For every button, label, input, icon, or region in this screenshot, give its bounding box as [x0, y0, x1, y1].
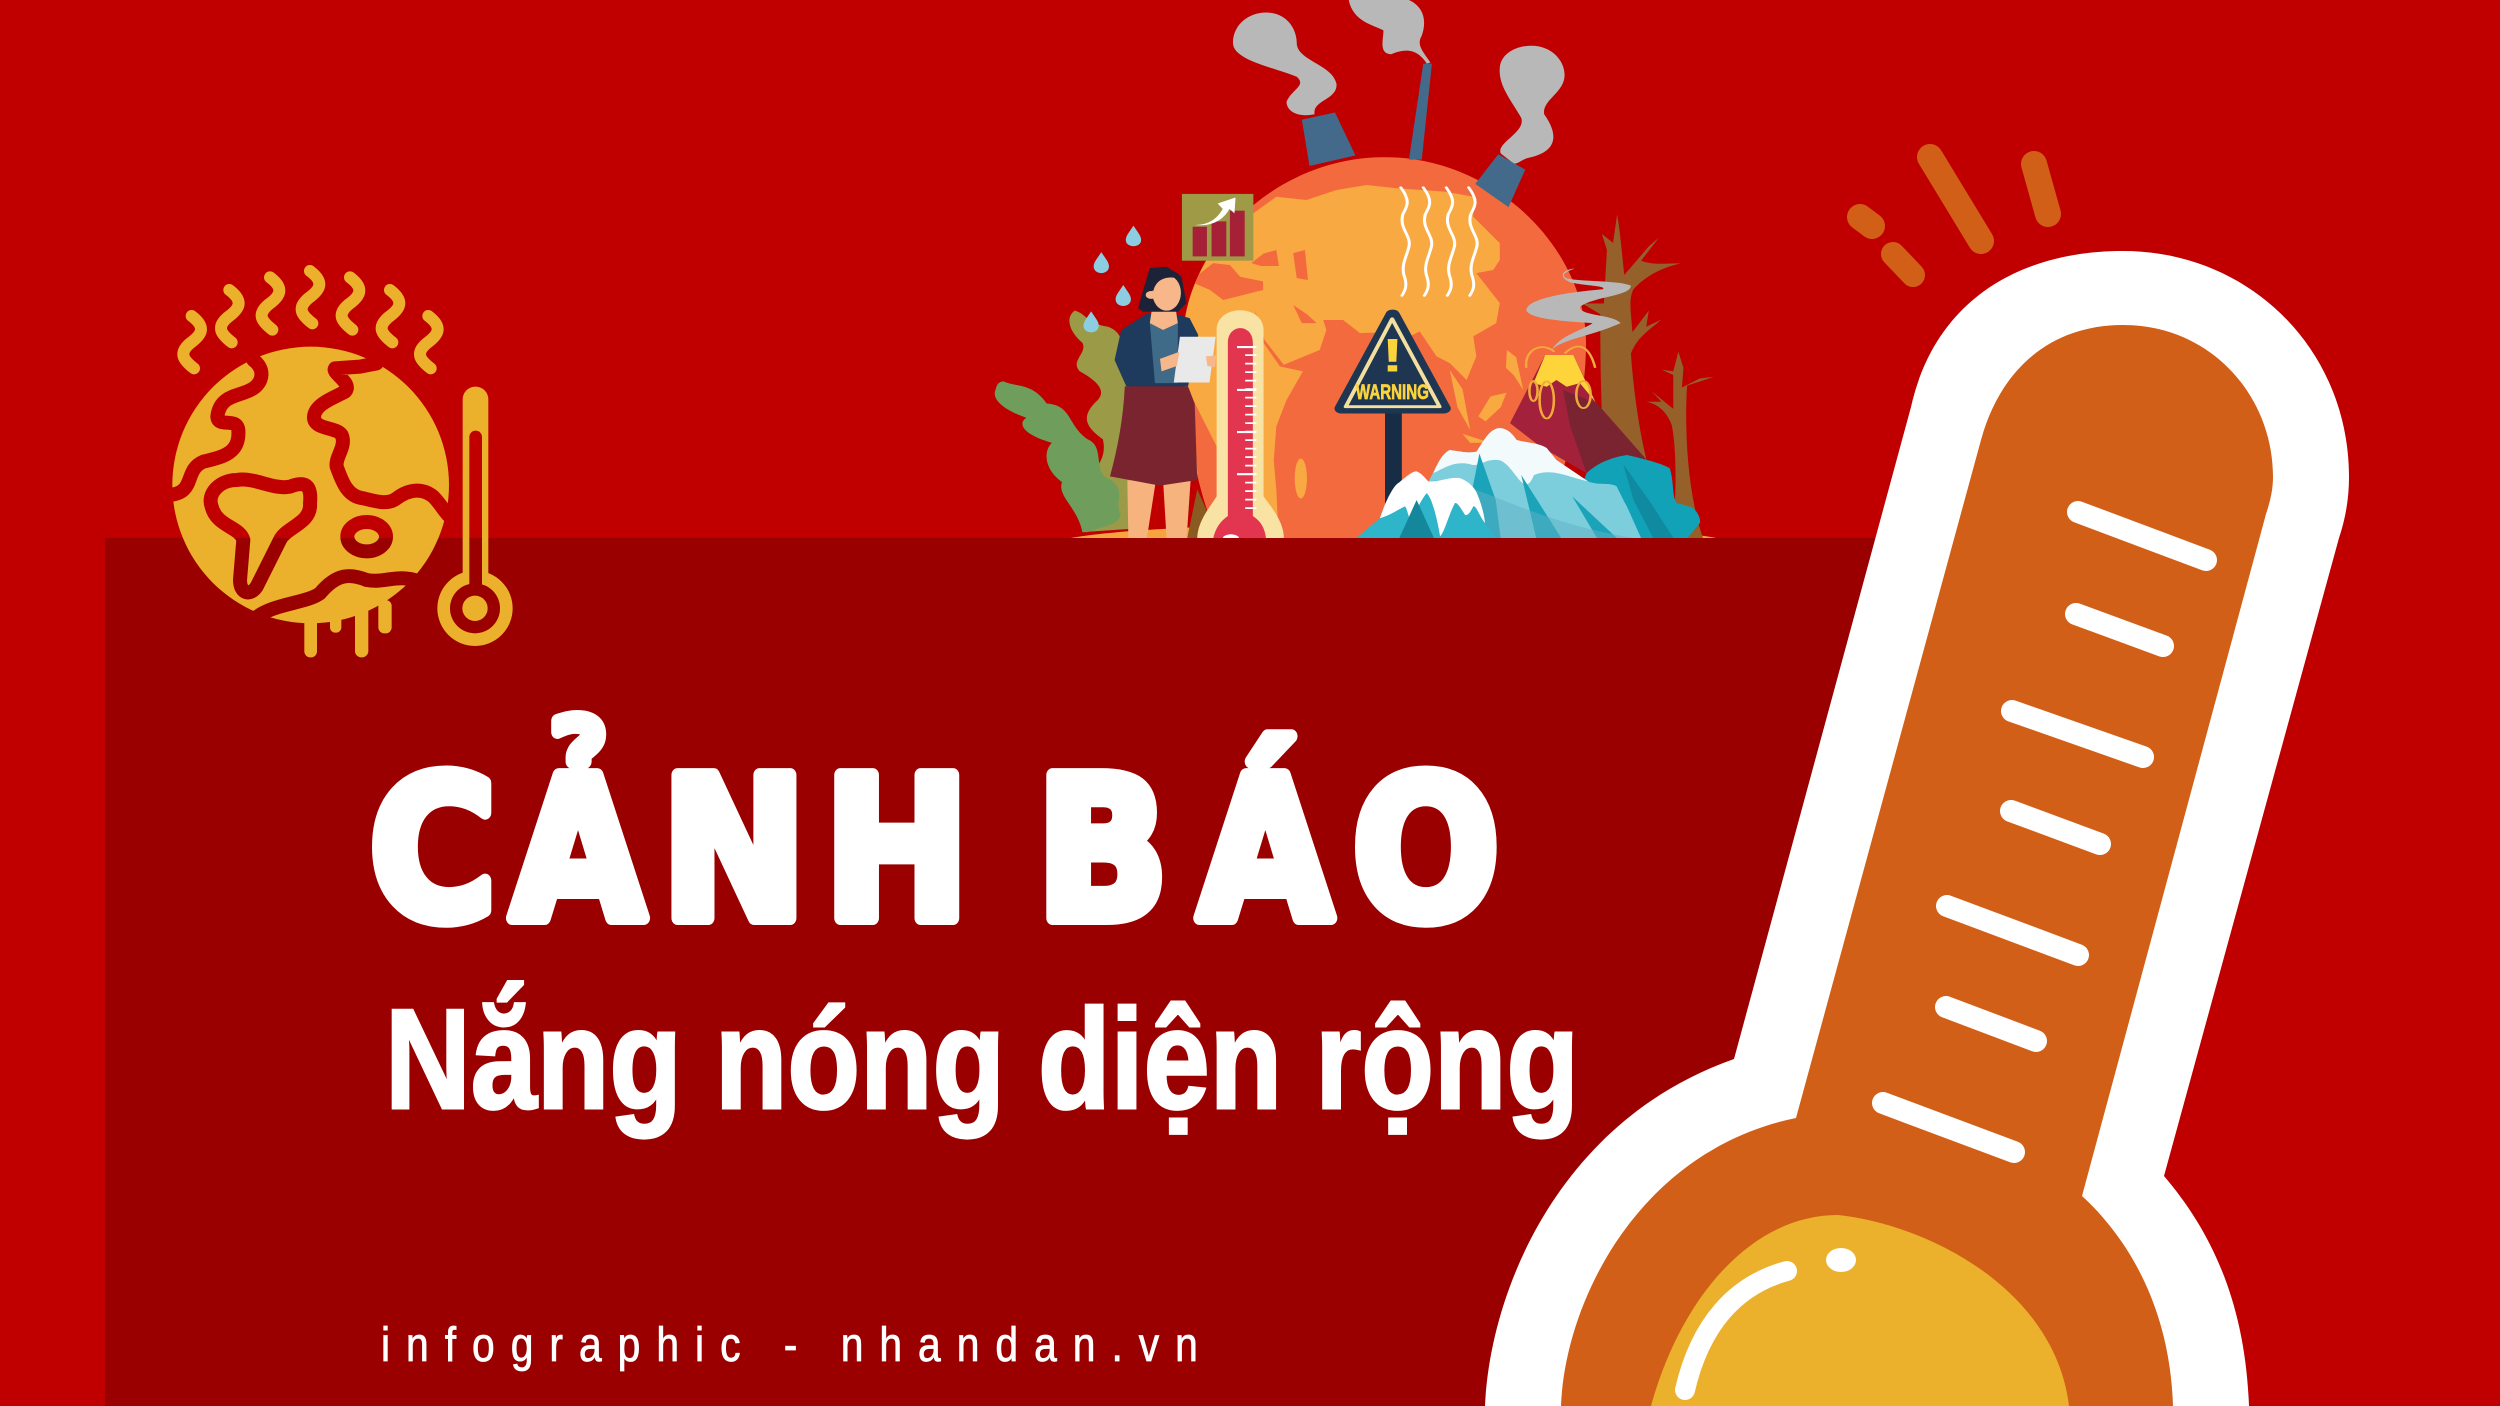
icon: sweat drops: [1083, 226, 1141, 332]
icon: continents: [1184, 185, 1500, 517]
icon: green leaf: [995, 381, 1121, 532]
icon: melting earth with thermometer: [172, 271, 513, 657]
icon: melting globe: [172, 347, 449, 657]
icon: teal mountain: [1562, 455, 1700, 539]
title: CẢNH BÁO: CẢNH BÁO: [370, 715, 1499, 965]
icon: warning sign: [1342, 315, 1444, 504]
icon: heat squiggles: [183, 271, 438, 368]
icon: factory chimneys: [1302, 64, 1525, 207]
subtitle: Nắng nóng diện rộng: Nắng nóng diện rộng: [385, 980, 1579, 1139]
icon: snowy foreground peak: [1355, 471, 1497, 539]
thermometer bulb: [1651, 1215, 2069, 1406]
icon: chimney smoke: [1233, 0, 1565, 164]
thermometer tick marks: [1883, 512, 2206, 1152]
icon: trees: [1582, 214, 1714, 539]
icon: rising bar chart: [1182, 194, 1253, 261]
panel: dark red title block: [105, 538, 1905, 1406]
icon: icy mountain: [1419, 428, 1642, 539]
icon: orange ground mound: [1065, 523, 1723, 539]
icon: volcano smoke: [1526, 269, 1631, 350]
icon: earth globe: [1184, 157, 1586, 538]
icon: olive leaf: [1069, 311, 1136, 532]
icon: warning sign: !: [1381, 329, 1404, 382]
icon: woman with notepad: [1110, 267, 1216, 539]
icon: volcano: [1510, 347, 1647, 473]
heat dashes above thermometer: [1860, 157, 2048, 275]
thermometer outline: [1485, 251, 2349, 1406]
illustration: overheating earth scene: [995, 0, 1723, 543]
credit line: infographic - nhandan.vn: [381, 1319, 1198, 1372]
icon: heat waves: [1401, 187, 1477, 296]
icon: red thermometer: [1197, 310, 1284, 543]
icon: warning sign: WARNING: [1356, 380, 1429, 404]
thermometer: large tilted thermometer: [1485, 157, 2349, 1406]
icon: seas and islands: [1194, 250, 1316, 510]
icon: brown leaf: [1187, 489, 1215, 539]
bulb highlight: [1685, 1248, 1856, 1390]
thermometer body: [1561, 325, 2273, 1406]
icon: small thermometer: [437, 387, 513, 646]
